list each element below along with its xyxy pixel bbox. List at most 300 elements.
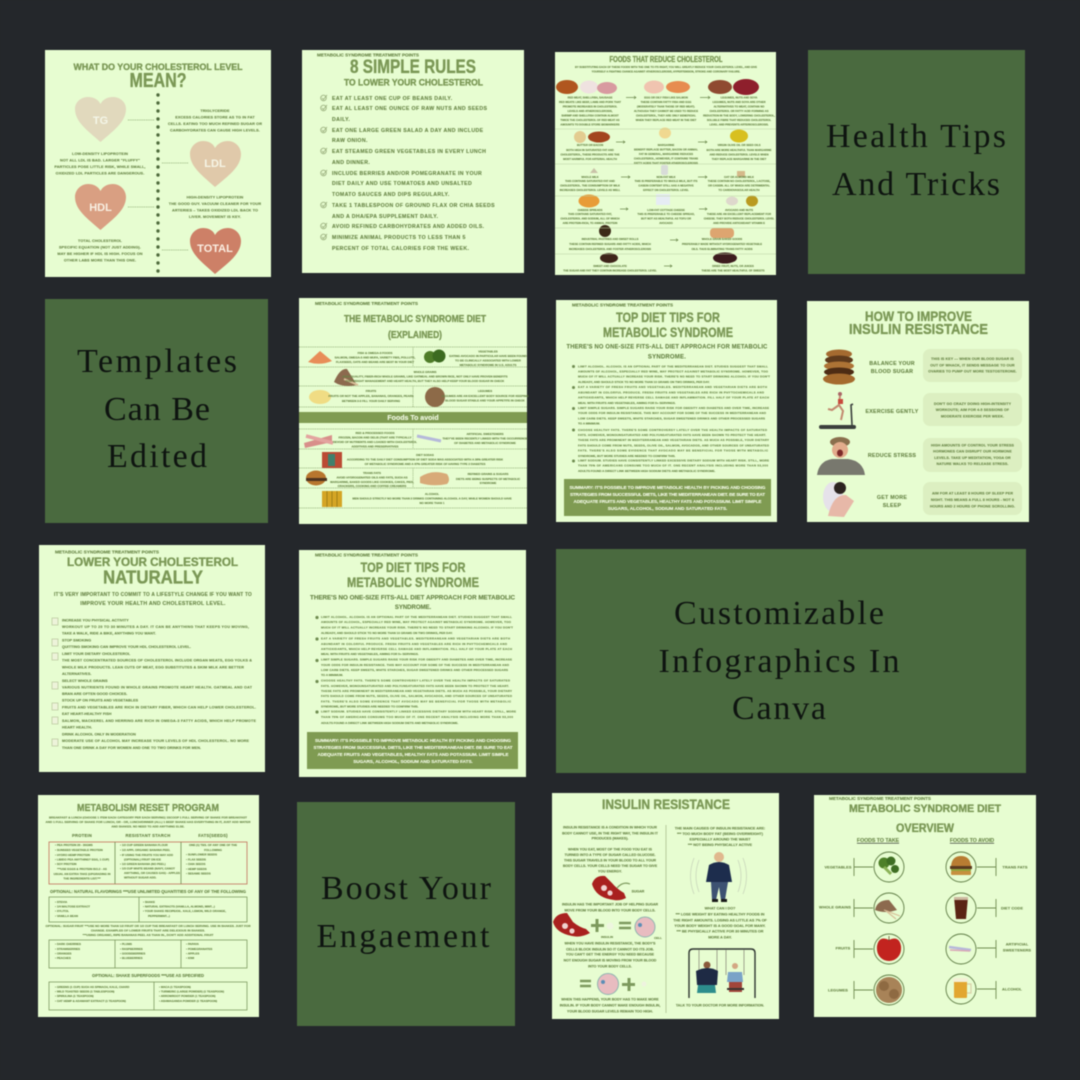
labels: TRANS FATS [1002, 864, 1028, 870]
flavorings text: • VANILLA BEAN [55, 914, 78, 918]
panel: lower your cholesterol naturally [39, 545, 265, 772]
tips list: AMOUNTS OF ALCOHOL, ESPECIALLY RED WINE, MAY PROTECT AGAINST METABOLIC SYNDROME. HOWEVER, TOO [321, 620, 512, 624]
rows: advice text: DON'T GO CRAZY DOING HIGH-INTENSITY [934, 402, 1012, 406]
superfoods text [55, 985, 224, 1003]
food swap text: BUTTER OR BACON [577, 143, 603, 147]
table: red text: • HYDRO HEMP PROTEIN [55, 853, 90, 857]
lifestyle list: SELECT WHOLE GRAINS [62, 679, 108, 683]
left text: insulin role [562, 902, 658, 912]
icon: blood vessel with sugar [592, 876, 645, 900]
labels [819, 864, 1031, 992]
heart: HDL: HDL [89, 202, 112, 214]
left text: outcome: YOUR BLOOD SUGAR LEVELS REMAIN TOO HIGH. [567, 1010, 653, 1014]
rows: labels: SLEEP [883, 503, 902, 509]
food swap text: THIS CONTAINS SATURATED FAT AND [565, 179, 615, 183]
right text: causes: THE MAIN CAUSES OF INSULIN RESISTANCE ARE: [675, 826, 765, 830]
right text: causes: *** NOT BEING PHYSICALLY ACTIVE [688, 843, 753, 847]
panel: metabolism reset program [38, 795, 259, 1017]
text: triglyceride: EXCESS CALORIES STORE AS TG IN FAT [175, 116, 255, 120]
icon: blood vessel with sugar: SUGAR [632, 890, 645, 894]
equation: blood plus insulin equals cell: INSULIN [601, 935, 613, 939]
column heads [72, 833, 228, 838]
label: section: METABOLIC SYNDROME TREATMENT POINTS [55, 550, 159, 554]
food swap text: CASEIN CONTENT STILL HAS A NEGATIVE [638, 184, 694, 188]
subheading: IMPROVE YOUR HEALTH AND CHOLESTEROL LEVEL. [80, 601, 226, 607]
column heads: RESISTANT STARCH [126, 833, 170, 838]
heading: HOW TO IMPROVE [865, 309, 972, 324]
tips list: ABUNDANT IN COLORFUL PRODUCE. FRESH FRUITS AND VEGETABLES ARE RICH IN PHYTOCHEMICALS AND [321, 642, 508, 646]
column heads: FOODS TO AVOID [950, 838, 994, 844]
text: foods to avoid: ALCOHOL [425, 492, 439, 496]
tips list: LOW CARB DIETS. KEEP SWEETS, WHITE STARCHES, SUGAR SWEETENED DRINKS AND OTHER PROCESSED SUGARS [578, 416, 765, 420]
lifestyle list: DRINK ALCOHOL ONLY IN MODERATION [62, 732, 136, 736]
table: red text: • IF USING THE FRUITS YOU MAY ADD [120, 853, 173, 857]
tagline text: Customizable [674, 595, 884, 632]
text: foods to take: FRUITS [366, 389, 376, 393]
food swap text: AND PROVIDE ANTIOXIDANT VITAMIN E [713, 221, 765, 225]
tips list: ADULTS FOUND A DIRECT LINK BETWEEN HIGH SODIUM DIETS AND METABOLIC SYNDROME. [321, 721, 459, 725]
tips list: CHOOSE HEALTHY FATS. THERE'S SOME CONTROVERSY LATELY OVER THE HEALTH IMPACTS OF SATURATED [578, 428, 768, 432]
text: foods to avoid: REFINED GRAINS & SUGARS [468, 472, 508, 476]
rules list: EAT ONE LARGE GREEN SALAD A DAY AND INCLUDE [332, 128, 484, 134]
tips list: MUCH OF IT WILL ACTUALLY INCREASE YOUR RISK. THERE'S NO NEED TO START DRINKING ALCOHOL IF YOU DON'T [321, 626, 513, 630]
food swap text: THESE CONTAIN NO CHOLESTEROL, LACTOSE, [708, 179, 771, 183]
right text: causes: *** TOO MUCH BODY FAT (BEING OVERWEIGHT) [677, 832, 764, 836]
food swap text: CHOLESTEROL. THE CONSUMPTION OF MILK [560, 184, 620, 188]
text: foods to avoid: AVOID HYDROGENATED OILS AND FATS, SUCH AS [336, 476, 408, 480]
rules list: PERCENT OF TOTAL CALORIES FOR THE WEEK. [332, 246, 469, 252]
lifestyle list: THAN ONE DRINK A DAY FOR WOMEN AND ONE TO TWO DRINKS FOR MEN. [62, 746, 201, 750]
icon: broccoli [878, 856, 899, 874]
food swap text: FAT IN GENERAL, MARGARINE REDUCES [639, 152, 693, 156]
food swap text: FATTY ACIDS THAT FOSTER ATHEROSCLEROSIS [634, 161, 698, 165]
lifestyle list: WHOLE MILK PRODUCTS. LEAN CUTS OF MEAT, EGG SUBSTITUTES & SKIM MILK ARE BETTER [62, 666, 244, 670]
tips list: TO A MINIMUM. [578, 422, 600, 426]
text: foods to avoid: MEN SHOULD STRICTLY NO MORE THAN 2 DRINKS CONTAINING ALCOHOL A DAY, WHILE WOMEN SHOULD HAVE [352, 496, 512, 500]
text: foods to take: FLAXSEED, OATS AND BEANS ARE BEST IN YOUR DIET [336, 360, 414, 364]
rules list: EAT STEAMED GREEN VEGETABLES IN EVERY LUNCH [332, 149, 486, 155]
tips list: LOW CARB DIETS. KEEP SWEETS, WHITE STARCHES, SUGAR SWEETENED DRINKS AND OTHER PROCESSED SUGARS [321, 668, 508, 672]
rows: advice text: AIM FOR AT LEAST 8 HOURS OF SLEEP PER [932, 492, 1013, 496]
summary box [564, 479, 771, 516]
summary box: SUMMARY: IT'S POSSIBLE TO IMPROVE METABOLIC HEALTH BY PICKING AND CHOOSING [570, 485, 766, 490]
left text: resistance: NOT ENOUGH SUGAR IS MOVING FROM YOUR BLOOD [564, 958, 657, 962]
table: red text [54, 843, 237, 880]
tips list: AMOUNTS OF ALCOHOL, ESPECIALLY RED WINE, MAY PROTECT AGAINST METABOLIC SYNDROME. HOWEVER, TOO [578, 370, 769, 374]
intro [575, 65, 757, 74]
intro: AND 1 FULL SERVING OF SHAKE FOR LUNCH, OR - OR, LUNCH/DINNER (ALL) 1 BEEF SHAKE HAS EVERYTHING IN IT, JUST ADD WATER [46, 820, 251, 824]
tips list: SYNDROME, BUT MORE STUDIES ARE NEEDED TO CONFIRM THIS. [321, 704, 419, 708]
banner: foods to avoid: Foods To avoid [387, 415, 439, 422]
image: woman with pillow [823, 482, 854, 517]
text: LDL [54, 152, 146, 176]
lifestyle list: LIMIT YOUR DIETARY CHOLESTEROL [62, 652, 131, 656]
table: red text: • SOY PROTEIN [55, 862, 77, 866]
labels: SWEETENERS [1003, 948, 1031, 952]
summary box [307, 732, 518, 769]
label: section: METABOLIC SYNDROME TREATMENT POINTS [572, 302, 673, 308]
rows: labels [865, 361, 919, 509]
tagline text: Health Tips [826, 118, 1006, 155]
food swap text: THESE ARE THE MOST HEALTHFUL OF SWEETS [701, 268, 765, 272]
label: section: METABOLIC SYNDROME TREATMENT POINTS [315, 552, 418, 558]
food swap text: THEY REPLACE MARGARINE IN THE DIET [712, 157, 767, 161]
text: total cholesterol: TOTAL CHOLESTEROL [78, 239, 123, 243]
labels: WHOLE GRAINS [819, 904, 851, 910]
food swap text: SHRIMP AND SHELLFISH CONTAIN ALMOST [561, 114, 619, 118]
left text: intro: BODY CELLS. YOUR CELLS NEED THE SUGAR TO GIVE [563, 864, 658, 868]
lifestyle list: FRUITS AND VEGETABLES ARE RICH IN DIETARY FIBER, WHICH CAN HELP LOWER CHOLESTEROL. [62, 706, 256, 710]
text: foods to avoid: RED & PROCESSED FOODS [355, 431, 395, 435]
food swap text: AMOUNTS TO DOUBLE STORE BIOMARKERS [560, 122, 620, 126]
subheading: THERE'S NO ONE-SIZE FITS-ALL DIET APPROACH FOR METABOLIC [310, 596, 516, 602]
tips list: CHOOSE HEALTHY FATS. THERE'S SOME CONTROVERSY LATELY OVER THE HEALTH IMPACTS OF SATURATED [321, 679, 511, 683]
connectors [854, 858, 996, 999]
icon: apple [877, 936, 901, 961]
bullets [572, 365, 575, 462]
labels: VEGETABLES [824, 864, 852, 870]
table: superfoods [49, 982, 247, 1010]
flavorings text: PEPPERMINT...) [148, 914, 170, 918]
superfoods text: • ARROWROOT POWDER (1 TEASPOON) [159, 994, 216, 998]
left text: resistance [564, 942, 657, 968]
text: triglyceride: CELLS. EATING TOO MUCH REFINED SUGAR OR [168, 122, 262, 126]
illustration: swing [689, 949, 755, 998]
food swap text: BUT NOT AS HEALTHFUL AS TOFU OR [641, 216, 691, 220]
left text: resistance: WHEN YOU HAVE INSULIN RESISTANCE, THE BODY'S [564, 942, 656, 946]
summary box: ADEQUATE FRUITS AND VEGETABLES, HEALTHY FATS AND POTASSIUM. LIMIT SIMPLE [574, 499, 762, 504]
subheading [566, 344, 768, 360]
lifestyle list [62, 618, 256, 750]
heading: METABOLISM RESET PROGRAM [77, 802, 219, 814]
heading: INSULIN RESISTANCE [849, 322, 988, 338]
text: foods to avoid: ARTIFICIAL SWEETENERS [466, 432, 504, 436]
tips list: THAN 75% OF AMERICANS CONSUME TOO MUCH OF IT. ONE RECENT ANALYSIS INCLUDING MORE THAN 53,000 [578, 464, 768, 468]
summary box: SUMMARY: IT'S POSSIBLE TO IMPROVE METABOLIC HEALTH BY PICKING AND CHOOSING [315, 738, 511, 743]
text: foods to avoid: ADDITIVES AND PRESERVATIVES [352, 444, 399, 448]
right text: causes [675, 826, 765, 847]
subheading [54, 592, 252, 607]
tips list: YOUR ODDS FOR INSULIN RESISTANCE. THIS MAY ACCOUNT FOR SOME OF THE SUCCESS IN MEDITERRANEAN AND [578, 411, 767, 415]
illustration: overweight man [690, 852, 746, 902]
intro: BREAKFAST & LUNCH (CHOOSE 1 ITEM EACH CATEGORY PER EACH SERVING) 1SCOOP 1 FULL SERVING OF SHAKE FOR BREAKFAST [49, 816, 247, 820]
rows: advice text: HOURS AND 2 HOURS OF PHONE SCROLLING. [930, 504, 1015, 508]
food swap text: OAT OR ALMOND MILK [724, 175, 754, 179]
tips list [578, 364, 770, 473]
labels: FRUITS [836, 946, 851, 950]
superfoods text: • MACA (1 TEASPOON) [159, 985, 191, 989]
right text: what can i do: *** BE PHYSICALLY ACTIVE FOR 30 MINUTES OR [677, 930, 764, 934]
table: red text: • 1/2 APPL ORGANIC BANANA PEEL [120, 848, 170, 852]
left text: resistance: INTO YOUR BODY CELLS. [588, 964, 632, 968]
dotted timeline [156, 95, 160, 274]
image: cookies [823, 350, 855, 384]
text: foods to take: METABOLIC SYNDROME IN U.S. ADULTS [460, 363, 516, 367]
arrows [616, 96, 710, 267]
intro: BY SUBSTITUTING EACH OF THESE FOODS WITH THE ONE TO ITS RIGHT, YOU WILL GREATLY REDUCE YOUR CHOLESTEROL LEVEL, AND GIVE [575, 65, 757, 69]
column heads: FOODS TO TAKE [857, 838, 900, 844]
tips list: LIMIT SIMPLE SUGARS. SIMPLE SUGARS RAISE YOUR RISK FOR OBESITY AND DIABETES AND OVER TIME, INCREASE [578, 406, 769, 410]
left text: intro: WHEN YOU EAT, MOST OF THE FOOD YOU EAT IS [568, 848, 653, 852]
intro: AND SHAKES. NO NEED TO ADD ANYTHING ELSE. [111, 824, 185, 828]
food swap text: SOLUBLE FIBRE THAT REDUCES CHOLESTEROL [707, 118, 772, 122]
food swap text: ALTERNATIVES TO MEAT, CONTAIN NO [714, 104, 764, 108]
rows: advice text: OUT OF WHACK, IT SENDS MESSAGE TO OUR [930, 364, 1015, 368]
text: triglyceride [168, 109, 262, 132]
table: red text: • FLAX SEEDS [186, 858, 206, 862]
text: HDL: ARTERIES – TAKES OXIDIZED LDL BACK TO [172, 208, 258, 212]
lifestyle list: EAT HEART-HEALTHY FISH [62, 712, 112, 716]
food swap text: INCREASES CHOLESTEROL LEVELS AS WELL [560, 188, 621, 192]
table: red text: • 1/2 GREEN BANANA (NO PEEL) [120, 862, 166, 866]
heading: FOODS THAT REDUCE CHOLESTEROL [610, 55, 723, 64]
heading: METABOLIC SYNDROME DIET [849, 803, 1001, 815]
rules list: AND A DHA/EPA SUPPLEMENT DAILY. [332, 214, 438, 220]
left text: intro: TURNED INTO A TYPE OF SUGAR CALLED GLUCOSE. [564, 853, 656, 857]
equation: blood plus insulin equals cell: CELL [654, 936, 662, 940]
tagline text: Can Be [104, 391, 210, 428]
tips list: FATS. HOWEVER, MONOUNSATURATED AND POLYUNSATURATED FATS HAVE BEEN SHOWN TO PROTECT THE HEART. [321, 684, 509, 688]
food swap text [559, 96, 775, 272]
lifestyle list: STOCK UP ON FRUITS AND VEGETABLES [62, 699, 139, 703]
table: red text: • 1/3 CUP WHITE BEANS (NAVY, CANOT [120, 866, 175, 870]
food swap text: PROMOTE INCREASES IN CHOLESTEROL [563, 104, 618, 108]
text: total cholesterol [57, 239, 143, 262]
food swap text: WHOLE MILK [581, 175, 599, 179]
fruit text: • STRAWBERRIES [55, 947, 80, 951]
left text: intro: THIS SUGAR TRAVELS IN YOUR BLOOD TO ALL YOUR [564, 858, 657, 862]
text: LDL: PARTICLES POSE LITTLE RISK, WHILE SMALL, [54, 165, 146, 169]
table: red text: • PEA PROTEIN 25 - 30GMS [55, 843, 93, 847]
lifestyle list: QUITTING SMOKING CAN IMPROVE YOUR HDL CHOLESTEROL LEVEL. [62, 645, 191, 649]
food swap text: MARGARINE [658, 143, 674, 147]
food swap text: BOTH HIGH IN SATURATED FAT AND [566, 148, 614, 152]
heading: TOP DIET TIPS FOR [616, 309, 720, 325]
summary box: SUGARS, ALCOHOL, SODIUM AND SATURATED FATS. [608, 506, 727, 511]
tagline text: Canva [732, 690, 826, 727]
text: HDL: LIVER. MOVEMENT IS KEY. [189, 215, 241, 219]
heading [347, 559, 479, 590]
food swap text: THIS IS PREFERABLE TO CHEESE SPREAD, [637, 212, 695, 216]
tips list: ALREADY, AND SHOULD STICK TO NO MORE THAN 10 GRAMS ON TWO DRINKS, PER DAY. [321, 631, 453, 635]
rows: labels: BLOOD SUGAR [871, 369, 913, 375]
image: treadmill [819, 392, 856, 429]
heading: LOWER YOUR CHOLESTEROL [67, 557, 238, 569]
image: laughing man [817, 437, 865, 475]
heading: METABOLIC SYNDROME [603, 324, 733, 340]
text: foods to avoid [330, 431, 528, 505]
tips list: LIMIT SODIUM. STUDIES HAVE CONSISTENTLY LINKED EXCESSIVE DIETARY SODIUM WITH HEART RISK. STILL, MORE [321, 710, 516, 714]
table: flavorings [49, 897, 247, 922]
column heads: FATS(SEEDS) [198, 833, 228, 838]
rows: advice text: HIGH AMOUNTS OF CONTROL YOUR STRESS [931, 444, 1014, 448]
dividers [555, 129, 776, 254]
rows: advice text: WORKOUTS; AIM FOR 4-5 SESSIONS OF [936, 408, 1010, 412]
fruit text: • BLUEBERRIES [120, 956, 143, 960]
text: foods to take: TO BE CLINICALLY ASSOCIATED WITH LOWER [455, 358, 522, 362]
heart: LDL [190, 141, 241, 187]
food swap text: THIS CONTAINS SATURATED FAT, [568, 212, 612, 216]
rules list: EAT AL LEAST ONE OUNCE OF RAW NUTS AND SEEDS [332, 106, 488, 112]
food swap text: MOST HARMFUL FOR ARTERIAL HEALTH [563, 157, 617, 161]
heading: cholesterol level: WHAT DO YOUR CHOLESTEROL LEVEL [74, 62, 243, 73]
labels: DIET CODE [1001, 906, 1023, 910]
lifestyle list: STOP SMOKING [62, 638, 91, 642]
food swap text: BOTH ARE MORE HEALTHFUL THAN MARGARINE [707, 148, 772, 152]
summary box: STRATEGIES FROM SUCCESSFUL DIETS, LIKE THE MEDITERRANEAN DIET. BE SURE TO EAT [570, 492, 765, 497]
icon: beer [953, 978, 971, 998]
food swap text: CHOLESTEROL, HOWEVER, IT CONTAINS TRANS [634, 156, 698, 160]
icon: diet coke [954, 897, 968, 919]
rows: advice text: HORMONES CAN DISRUPT OUR HORMONE [933, 450, 1012, 454]
rules list: RAW ONION. [332, 138, 368, 144]
rows: labels: BALANCE YOUR [869, 361, 915, 367]
text: HDL: THE GOOD GUY. VACUUM CLEANER FOR YOUR [169, 202, 261, 206]
superfoods text: • WILD TOASTED SEEDS (1 TABLESPOON) [55, 990, 114, 994]
food images: foods to avoid [304, 435, 449, 507]
food swap text: DRIED FRUIT, NUTS, OR JUICES [712, 264, 754, 268]
rows: advice text: MODERATE EXERCISE PER WEEK. [941, 415, 1004, 419]
table: red text: WITHOUT SUGAR ADD. [124, 876, 157, 880]
tips list: ALREADY, AND SHOULD STICK TO NO MORE THAN 10 GRAMS ON TWO DRINKS, PER DAY. [578, 380, 710, 384]
food swap text: OILS. THUS ELIMINATING TRANS FATTY ACIDS [691, 247, 753, 251]
left text: intro: INSULIN RESISTANCE IS A CONDITION IN WHICH YOUR [563, 826, 657, 830]
panel: what do your cholesterol levels mean [45, 50, 271, 277]
subheading [310, 596, 516, 611]
tips list: MUCH OF IT WILL ACTUALLY INCREASE YOUR RISK. THERE'S NO NEED TO START DRINKING ALCOHOL IF YOU DON'T [578, 375, 770, 379]
fruit text: • PAPAYA [186, 942, 200, 946]
food swap text: LEGUMES, NUTS AND SOYA ARE OTHER [712, 100, 766, 104]
left text: resistance: CELLS BLOCK INSULIN SO IT CANNOT DO ITS JOB. [566, 948, 654, 952]
panel: customizable infographics in canva [556, 549, 1026, 773]
optional fruit note: OPTIONAL: SUGAR FRUIT ***USE NO MORE THAN 1/2 FRUIT OR 1/2 CUP THE BREAKFAST OR LUNCH SERVING. USE IN SHAKES. JUST FOR [46, 924, 251, 928]
heart: LDL: LDL [204, 158, 226, 170]
text: foods to avoid: TRANS FATS [363, 471, 381, 475]
summary box: STRATEGIES FROM SUCCESSFUL DIETS, LIKE THE MEDITERRANEAN DIET. BE SURE TO EAT [314, 745, 513, 750]
food swap text: CHEESE. THEY BOTH REDUCE CHOLESTEROL LEVEL [704, 216, 775, 220]
text: foods to avoid: MARGARINE, BAKED GOODS LIKE COOKIES, CAKES, PIES, [330, 480, 414, 484]
text: foods to take: FOR WEIGHT MANAGEMENT AND HEART HEALTH, BUT THEY ALSO HELP KEEP YOUR BLOOD SUGAR IN CHECK [346, 379, 505, 383]
tagline text: And Tricks [832, 166, 1000, 203]
food swap text: CHOLESTEROL AND SODIUM, ALL OF WHICH [560, 216, 620, 220]
table: red text: ONE (1) TBS. OF ANY ONE OF THE [189, 843, 237, 847]
tips list: EAT A VARIETY OF FRESH FRUITS AND VEGETABLES. MEDITERRANEAN AND VEGETARIAN DIETS ARE BOTH [321, 637, 510, 641]
superfoods text: • SPIRULINA (1 TEASPOON) [55, 994, 94, 998]
tagline text: Edited [107, 438, 207, 475]
table: fruit [49, 940, 247, 968]
panel: top diet tips for metabolic syndrome [556, 300, 777, 522]
heart: TG: TG [93, 115, 108, 127]
food swap text: RED MEAT, SHELLFISH, SAUSAGE [568, 96, 613, 100]
tips list: THESE FATS ARE PROMINENT IN MEDITERRANEAN AND VEGETARIAN DIETS. AS MUCH AS POSSIBLE, YOUR DIETARY [578, 438, 769, 442]
text: foods to take: BLOOD SUGAR STABLE AND YOUR APPETITE IN CHECK [445, 398, 526, 402]
tagline text: Templates [77, 343, 237, 380]
rules list: MINIMIZE ANIMAL PRODUCTS TO LESS THAN 5 [332, 235, 466, 241]
icon: sweeteners [949, 947, 971, 951]
tagline text [77, 343, 237, 475]
food swap text: VIRGIN OLIVE OIL OR SEED OILS [717, 143, 761, 147]
flavorings text: • NATURAL EXTRACTS (VANILLA, ALMOND, MINT...) [143, 904, 215, 908]
label: section: METABOLIC SYNDROME TREATMENT POINTS [315, 301, 418, 306]
text: foods to take: LEGUMES ARE AN EXCELLENT BODY SOURCE FOR KEEPING [442, 394, 529, 398]
left text: intro: BODY CANNOT USE, IN THE RIGHT WAY, THE INSULIN IT [562, 832, 659, 836]
fruit text: • DARK CHERRIES [55, 942, 81, 946]
text: foods to avoid: OF DIABETES AND METABOLIC SYNDROME [454, 441, 516, 445]
food swap text: LOW-FAT COTTAGE CHEESE [647, 208, 685, 212]
text: foods to take: LEGUMES [478, 389, 492, 393]
heading: 8 simple rules: 8 SIMPLE RULES [350, 57, 476, 78]
tips list: FATS SHOULD COME FROM NUTS, SEEDS, OLIVE OIL, SALMON, AVOCADOS, AND OTHER SOURCES OF UNSATURATED [578, 443, 770, 447]
text: foods to avoid: ACCORDING TO THE DAILY DIET CONSUMPTION OF DIET SODA WAS ASSOCIATED WITH A 36% GREATER RISK [347, 458, 504, 462]
rows: advice text [928, 357, 1017, 508]
tips list: LIMIT SODIUM. STUDIES HAVE CONSISTENTLY LINKED EXCESSIVE DIETARY SODIUM WITH HEART RISK. STILL, MORE [578, 458, 769, 462]
tips list: FATS. THERE'S ALSO SOME EVIDENCE THAT AVOCADO MAY BE BENEFICIAL FOR THOSE WITH METABOLIC [321, 699, 512, 703]
subheading: THERE'S NO ONE-SIZE FITS-ALL DIET APPROACH FOR METABOLIC [566, 344, 768, 350]
food swap text: LEGUMES, NUTS AND SOYA [721, 96, 757, 100]
text: foods to avoid: SYNDROME [480, 481, 496, 485]
labels: ARTIFICIAL [1006, 942, 1029, 946]
food swap text: ALTHOUGH THEY CANNOT BE USED TO REDUCE [634, 109, 698, 113]
text: foods to take: FISH & OMEGA-3 FOODS [358, 351, 392, 355]
food swap text: ARE PROTEIN-RICH, TO ANIMAL PROTEIN [563, 221, 617, 225]
heart: HDL [75, 184, 126, 230]
column divider [665, 825, 667, 1013]
tips list: LIMIT SIMPLE SUGARS. SIMPLE SUGARS RAISE YOUR RISK FOR OBESITY AND DIABETES AND OVER TIME, INCREASE [321, 658, 512, 662]
text: HDL: HIGH-DENSITY LIPOPROTEIN [187, 196, 244, 200]
rows: labels: EXERCISE GENTLY [865, 409, 919, 415]
section: natural flavorings: OPTIONAL: NATURAL FLAVORINGS ***USE UNLIMITED QUANTITIES OF ANY OF THE FOLLOWING [50, 889, 246, 894]
heading: THE METABOLIC SYNDROME DIET [344, 313, 486, 325]
heading [603, 309, 733, 340]
text: total cholesterol: MAY BE HIGHER IF HDL IS HIGH. FOCUS ON [57, 252, 143, 256]
column heads: PROTEIN [72, 833, 92, 838]
text: foods to take: WHOLE GRAINS [414, 370, 436, 374]
rows: labels: GET MORE [877, 495, 907, 501]
tips list: ANTIOXIDANTS, WHICH HELP REVERSE CELL DAMAGE AND INFLAMMATION. FILL HALF OF YOUR PLATE AT EACH [578, 396, 769, 400]
fruit text: • ORANGES [55, 952, 72, 956]
left text: outcome: WHEN THIS HAPPENS, YOUR BODY HAS TO MAKE MORE [561, 998, 659, 1002]
tagline text [658, 595, 900, 727]
left text: insulin role: MOVE FROM YOUR BLOOD INTO YOUR BODY CELLS. [565, 908, 655, 912]
food swap text: INCREASES CHOLESTEROL AND FOSTER ATHEROSCLEROSIS [569, 247, 651, 251]
flavorings text: • XYLITOL [55, 909, 69, 913]
lifestyle list: SALMON, MACKEREL AND HERRING ARE RICH IN OMEGA-3 FATTY ACIDS, WHICH HELP PROMOTE [62, 719, 256, 723]
tips list: FATS. HOWEVER, MONOUNSATURATED AND POLYUNSATURATED FATS HAVE BEEN SHOWN TO PROTECT THE HEART. [578, 433, 766, 437]
text: LDL: LOW-DENSITY LIPOPROTEIN [72, 152, 128, 156]
food swap text: CHOLESTEROL OR FATTY ACID FORMING AS [709, 109, 769, 113]
text: foods to take: HIGH-QUALITY, FIBER-RICH WHOLE GRAINS, LIKE OATMEAL AND BROWN RICE, NOT ONLY HAVE PROVEN BENEFITS [342, 374, 508, 378]
rows: labels: REDUCE STRESS [868, 453, 916, 459]
food swap text: LEVEL AND PREVENTS ARTERIOSCLEROSIS. [709, 122, 769, 126]
table: red text: THE INGREDIENTS LIST.*** [63, 876, 102, 880]
food swap text: NON-FAT MILK [656, 175, 676, 179]
lifestyle list: WORKOUT UP TO 20 TO 30 MINUTES A DAY. IT CAN BE ANYTHING THAT KEEPS YOU MOVING, [62, 625, 249, 629]
rules list: TOMATO SAUCES AND DIPS REGULARLY. [332, 192, 450, 198]
food swap text: BENEFIT REPLACE BUTTER, BACON OR ANIMAL [634, 148, 698, 152]
tips list: FATS SHOULD COME FROM NUTS, SEEDS, OLIVE OIL, SALMON, AVOCADOS, AND OTHER SOURCES OF UNSATURATED [321, 694, 513, 698]
flavorings text: • STEVIA [55, 900, 68, 904]
fruit text: • APPLES [186, 952, 199, 956]
dotted dividers [299, 347, 527, 508]
table: red text: • LIBIDO PEA ANYTHING? EGG, 1 CUP) [55, 858, 109, 862]
text: foods to avoid: CRACKERS, COOKING AND COFFEE CREAMERS [338, 484, 406, 488]
fruit text: • PLUMS [120, 942, 132, 946]
food swap text: RED MEATS LIKE BEEF, LAMB AND PORK THAT [559, 100, 621, 104]
rules list: AVOID REFINED CARBOHYDRATES AND ADDED OILS. [332, 224, 485, 230]
tips list: MEAL WITH FRUITS AND VEGETABLES, AIMING FOR 5+ SERVINGS. [321, 652, 419, 656]
subheading: SYNDROME. [648, 354, 686, 360]
rules list: TAKE 1 TABLESPOON OF GROUND FLAX OR CHIA SEEDS [332, 203, 495, 209]
